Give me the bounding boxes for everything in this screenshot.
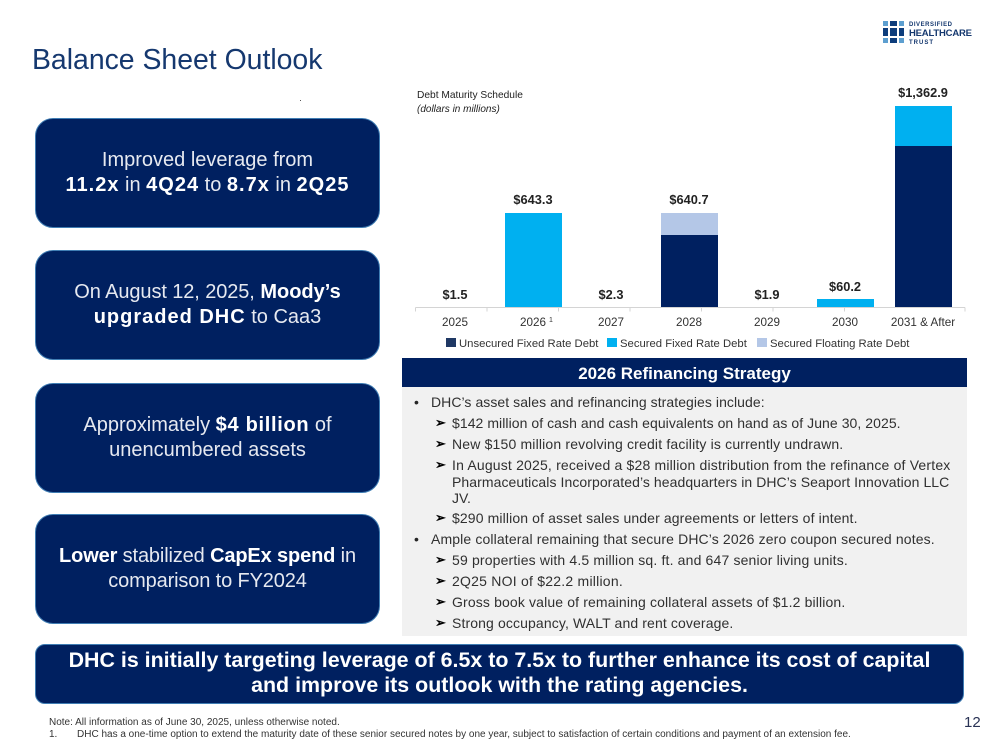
year labels: 2030 bbox=[832, 316, 858, 329]
text block: refinancing bullets: ➢ bbox=[435, 594, 446, 609]
text block: refinancing bullets: Ample collateral remaining that secure DHC’s 2026 zero coupon secured notes. bbox=[431, 531, 935, 547]
panel: unencumbered assets bbox=[35, 383, 380, 493]
footnotes: Note: All information as of June 30, 2025, unless otherwise noted. bbox=[49, 717, 340, 728]
text block: refinancing bullets bbox=[414, 394, 950, 631]
year labels bbox=[442, 316, 955, 329]
page number: 12 bbox=[964, 714, 981, 731]
bars bbox=[505, 106, 952, 308]
year labels: 2026 bbox=[520, 316, 546, 329]
text block: refinancing bullets: ➢ bbox=[435, 436, 446, 451]
text block: refinancing bullets: 59 properties with 4.5 million sq. ft. and 647 senior living units. bbox=[452, 552, 848, 568]
panel: Moody's upgrade: upgraded DHC to Caa3 bbox=[94, 306, 321, 328]
banner: leverage target: DHC is initially targeting leverage of 6.5x to 7.5x to further enhance its cost of capital bbox=[69, 648, 930, 672]
legend bbox=[446, 338, 910, 350]
panel: CapEx spend bbox=[35, 514, 380, 624]
text block: refinancing bullets: ➢ bbox=[435, 573, 446, 588]
panel: unencumbered assets: unencumbered assets bbox=[109, 439, 306, 461]
value labels: $1.9 bbox=[755, 287, 779, 302]
title: Balance Sheet Outlook bbox=[32, 44, 322, 76]
panel: refinancing strategy list bbox=[402, 387, 967, 636]
text block: refinancing bullets: • bbox=[414, 394, 419, 410]
year labels: 2027 bbox=[598, 316, 624, 329]
text block: refinancing bullets: ➢ bbox=[435, 457, 446, 472]
year labels: 1 bbox=[549, 317, 553, 324]
legend: Secured Fixed Rate Debt bbox=[620, 338, 748, 350]
heading bar: 2026 Refinancing Strategy bbox=[402, 358, 967, 387]
panel: improved leverage: Improved leverage from bbox=[102, 149, 313, 171]
value labels: $640.7 bbox=[669, 192, 709, 207]
logo: Diversified Healthcare Trust bbox=[883, 21, 972, 46]
value labels: $60.2 bbox=[829, 279, 861, 294]
banner: leverage target: and improve its outlook with the rating agencies. bbox=[251, 673, 748, 697]
panel: Moody's upgrade bbox=[35, 250, 380, 360]
year labels: 2028 bbox=[676, 316, 702, 329]
text block: refinancing bullets: ➢ bbox=[435, 552, 446, 567]
text block: refinancing bullets: Gross book value of remaining collateral assets of $1.2 billion. bbox=[452, 594, 845, 610]
legend: Unsecured Fixed Rate Debt bbox=[459, 338, 599, 350]
heading bar: 2026 Refinancing Strategy: 2026 Refinancing Strategy bbox=[578, 364, 791, 383]
text block: refinancing bullets: Pharmaceuticals Incorporated’s headquarters in DHC’s Seaport Innovation LLC bbox=[452, 474, 949, 490]
value labels: $1,362.9 bbox=[898, 85, 948, 100]
logo: Diversified Healthcare Trust: HEALTHCARE bbox=[909, 28, 972, 39]
text block: refinancing bullets: $290 million of asset sales under agreements or letters of intent. bbox=[452, 510, 858, 526]
banner: leverage target bbox=[35, 644, 964, 704]
chart title bbox=[417, 90, 523, 115]
text block: refinancing bullets: DHC’s asset sales and refinancing strategies include: bbox=[431, 394, 765, 410]
panel: Moody's upgrade: On August 12, 2025, Moody’s bbox=[74, 281, 341, 303]
text block: refinancing bullets: • bbox=[414, 531, 419, 547]
year labels: 2025 bbox=[442, 316, 468, 329]
value labels bbox=[443, 85, 948, 302]
panel: improved leverage: 11.2x in 4Q24 to 8.7x in 2Q25 bbox=[66, 174, 349, 196]
panel: CapEx spend: Lower stabilized CapEx spend in bbox=[59, 545, 356, 567]
small mark bbox=[300, 100, 301, 101]
panel: improved leverage bbox=[35, 118, 380, 228]
text block: refinancing bullets: In August 2025, received a $28 million distribution from the refinance of Vertex bbox=[452, 457, 950, 473]
chart title: (dollars in millions) bbox=[417, 104, 500, 115]
panel: unencumbered assets: Approximately $4 billion of bbox=[83, 414, 332, 436]
text block: refinancing bullets: Strong occupancy, WALT and rent coverage. bbox=[452, 615, 733, 631]
legend: Secured Floating Rate Debt bbox=[770, 338, 910, 350]
logo: Diversified Healthcare Trust: DIVERSIFIED bbox=[909, 22, 953, 28]
chart title: Debt Maturity Schedule bbox=[417, 90, 523, 101]
text block: refinancing bullets: $142 million of cash and cash equivalents on hand as of June 30, 2025. bbox=[452, 415, 901, 431]
text block: refinancing bullets: JV. bbox=[452, 490, 471, 506]
axis bbox=[416, 308, 965, 312]
value labels: $643.3 bbox=[513, 192, 553, 207]
footnotes bbox=[49, 717, 851, 740]
text block: refinancing bullets: ➢ bbox=[435, 415, 446, 430]
text block: refinancing bullets: New $150 million revolving credit facility is currently undrawn. bbox=[452, 436, 843, 452]
footnotes: 1. bbox=[49, 729, 57, 740]
text block: refinancing bullets: ➢ bbox=[435, 615, 446, 630]
text block: refinancing bullets: ➢ bbox=[435, 510, 446, 525]
value labels: $2.3 bbox=[599, 287, 623, 302]
value labels: $1.5 bbox=[443, 287, 467, 302]
year labels: 2029 bbox=[754, 316, 780, 329]
chart: debt maturity schedule bbox=[415, 85, 966, 350]
logo: Diversified Healthcare Trust: TRUST bbox=[909, 40, 933, 46]
year labels: 2031 & After bbox=[891, 316, 955, 329]
text block: refinancing bullets: 2Q25 NOI of $22.2 million. bbox=[452, 573, 623, 589]
footnotes: DHC has a one-time option to extend the maturity date of these senior secured notes by one year, subject to satisfaction of certain conditions and payment of an extension fee. bbox=[77, 729, 851, 740]
panel: CapEx spend: comparison to FY2024 bbox=[108, 570, 307, 592]
